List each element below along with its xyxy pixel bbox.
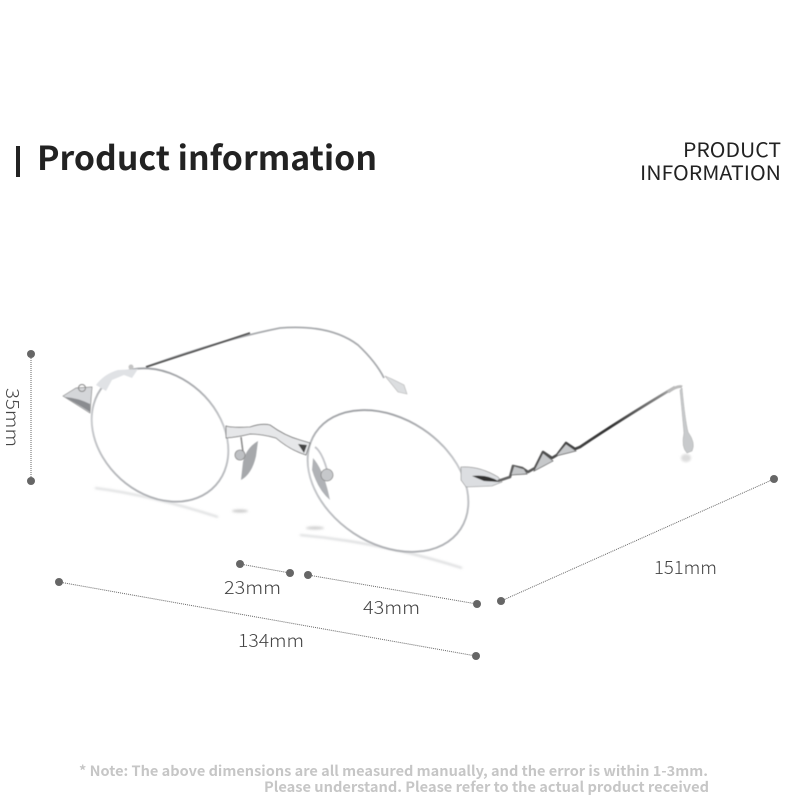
glasses [63, 327, 693, 581]
dimension: 134mm frame width: 134mm [238, 627, 304, 653]
right end piece and temple arm [461, 387, 693, 487]
left end piece [63, 364, 138, 413]
bridge [226, 424, 310, 455]
corner label: product information [640, 134, 781, 186]
corner label: product information: PRODUCT [683, 134, 781, 163]
dimension: 43mm lens width [304, 571, 481, 620]
footnote: Please understand. Please refer to the actual product received [264, 777, 709, 797]
dimension: 23mm bridge [224, 560, 294, 600]
title: Product information [37, 132, 377, 180]
dimension: 35mm height: 35mm [0, 388, 26, 447]
far temple arm [146, 327, 407, 394]
corner label: product information: INFORMATION [640, 157, 781, 186]
dimension: 151mm temple length [497, 475, 778, 605]
table shadows [95, 454, 691, 568]
nose pads [235, 437, 333, 500]
left lens [65, 341, 255, 529]
dimension: 35mm height [0, 350, 35, 485]
dimension: 151mm temple length: 151mm [654, 554, 717, 580]
dimension: 134mm frame width [55, 578, 480, 660]
dimension: 23mm bridge: 23mm [224, 574, 281, 600]
footnote: * Note: The above dimensions are all measured manually, and the error is within 1-3mm. [79, 761, 708, 781]
dimension: 43mm lens width: 43mm [363, 594, 420, 620]
footnote [79, 761, 709, 797]
right lens [281, 381, 495, 581]
